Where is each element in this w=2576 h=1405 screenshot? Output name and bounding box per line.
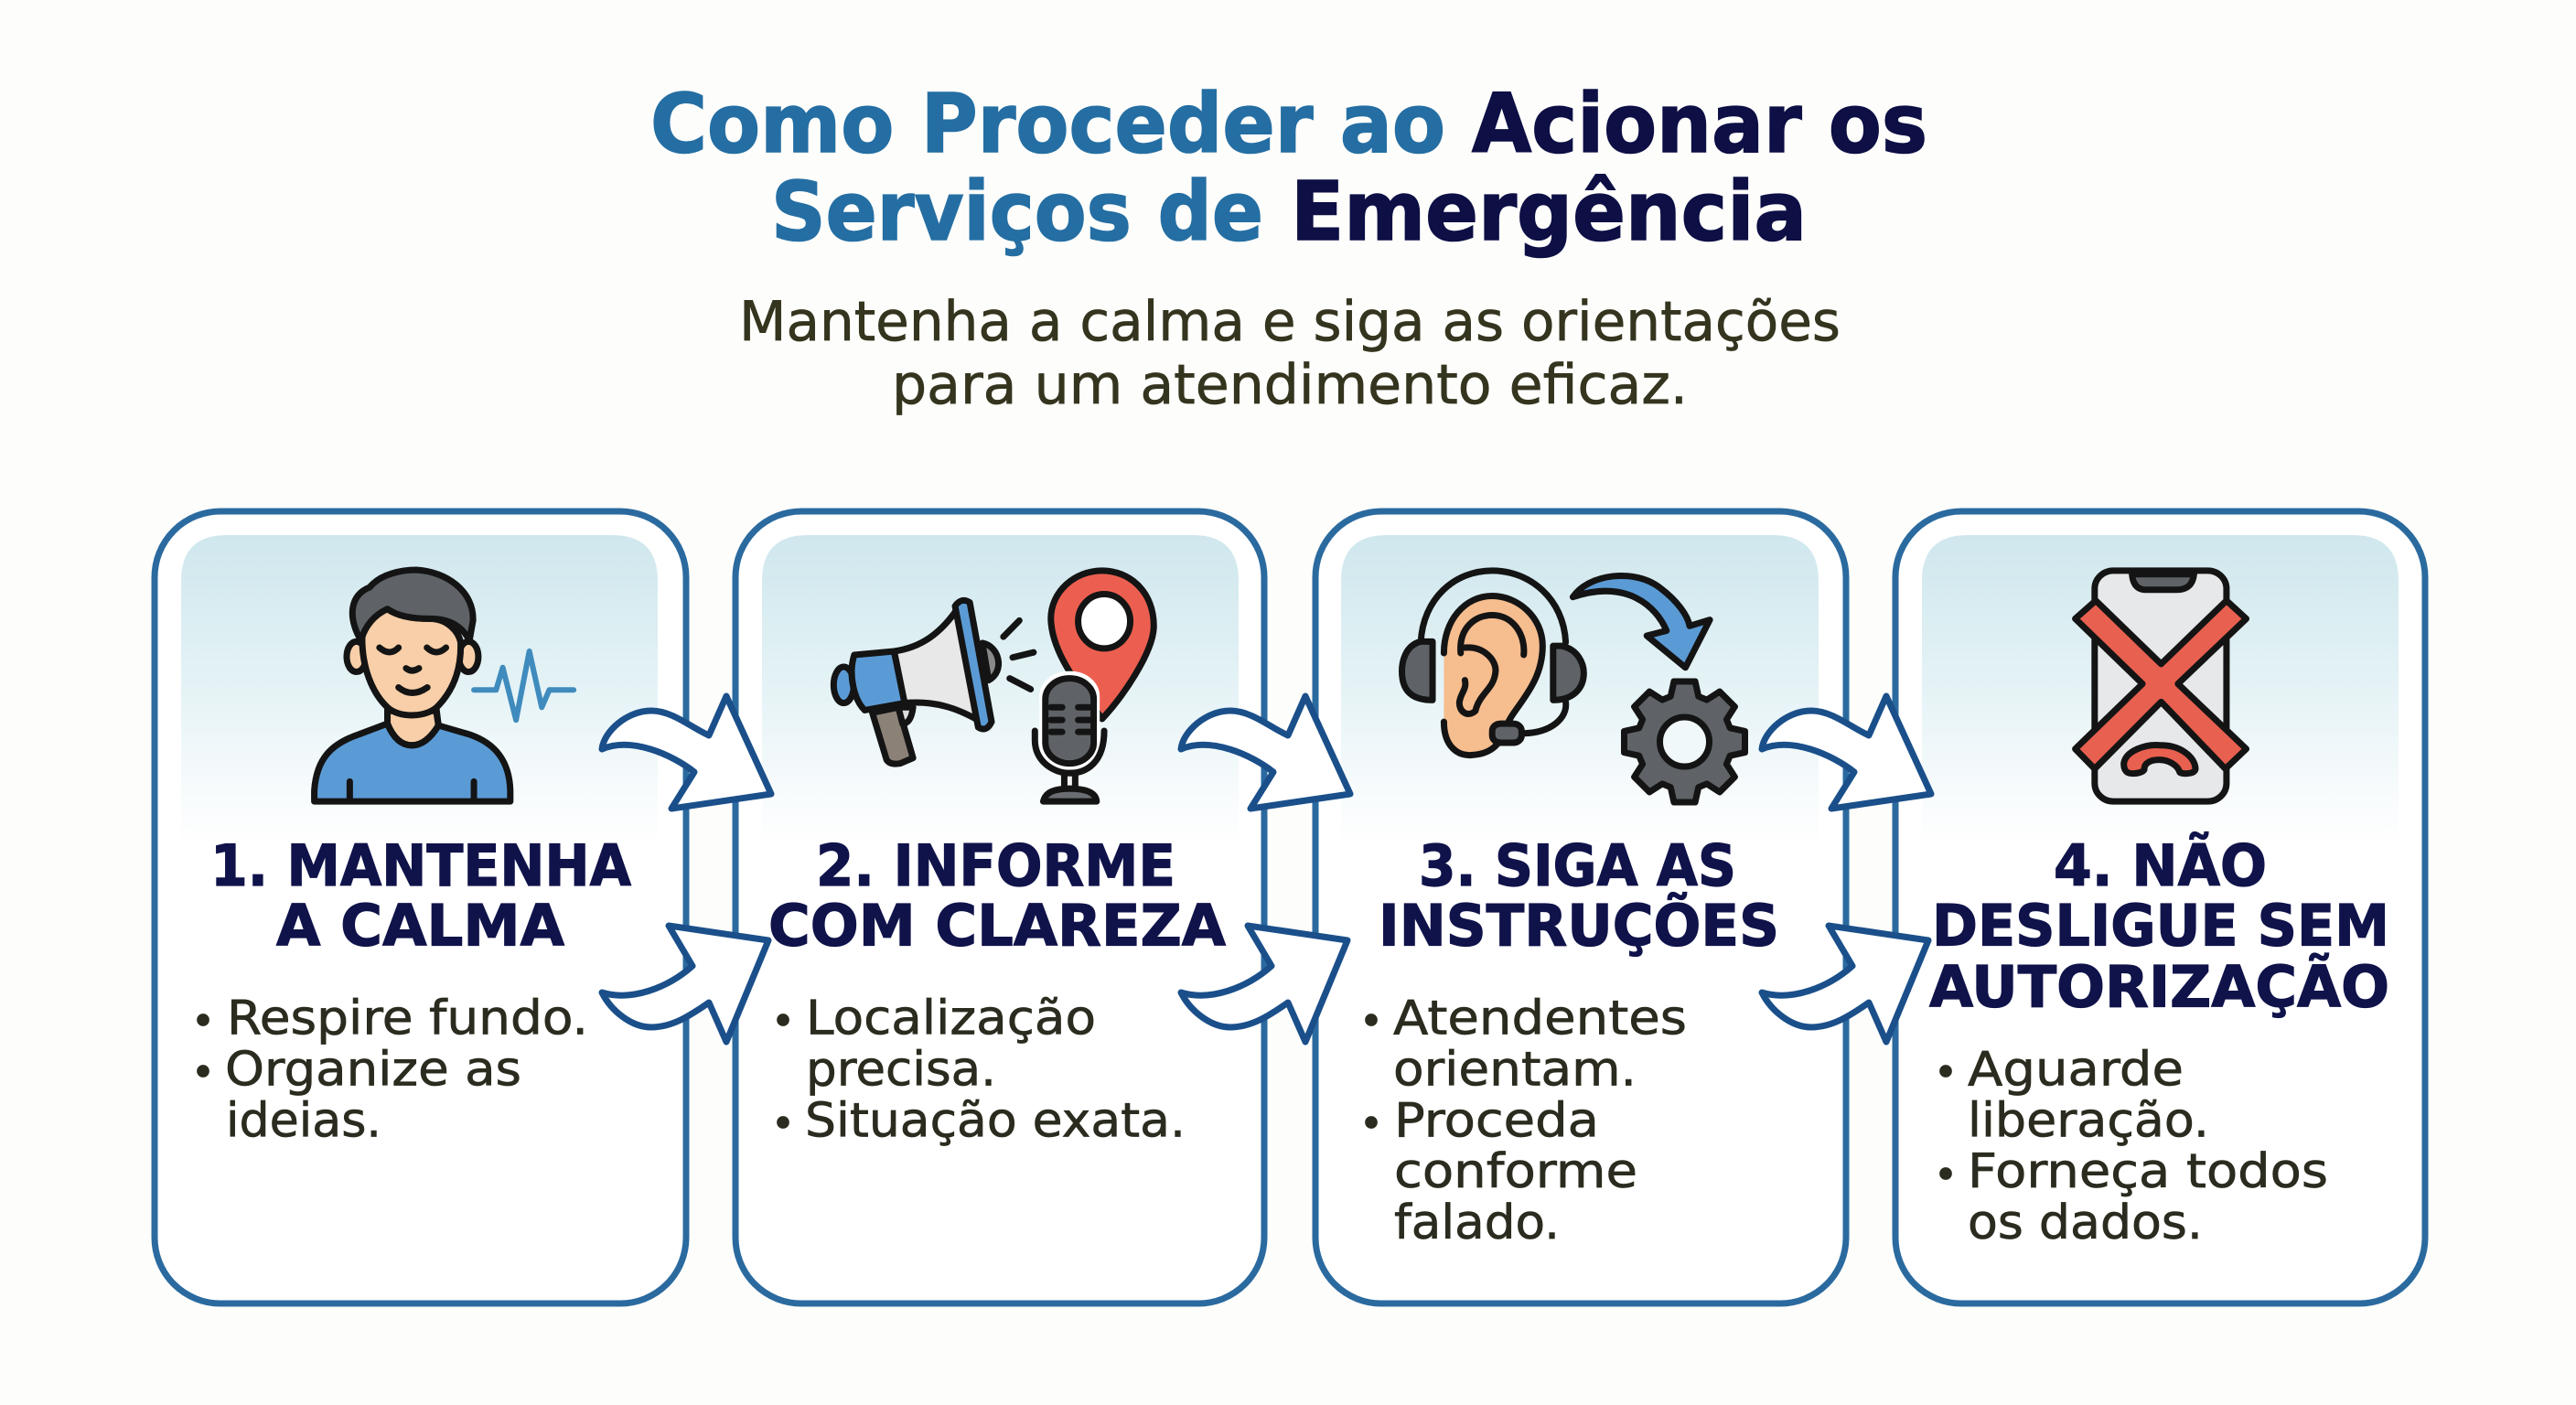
text: step 3 bullets: Atendentes xyxy=(1393,992,1687,1046)
panel: step 2 xyxy=(735,511,1264,1303)
heading: step 1 xyxy=(210,832,631,959)
icon: calm person with pulse xyxy=(315,570,574,801)
heading: step 4 xyxy=(1929,832,2389,1021)
title xyxy=(650,76,1927,259)
subtitle: Mantenha a calma e siga as orientações xyxy=(739,290,1841,354)
icon: phone crossed out xyxy=(2076,571,2247,801)
text: step 1 bullets: Organize as xyxy=(225,1043,521,1098)
title: Acionar os xyxy=(1472,76,1927,171)
text: step 4 bullets: os dados. xyxy=(1968,1196,2203,1250)
heading: step 2: 2. INFORME xyxy=(816,832,1175,899)
text: step 4 bullets: Forneça todos xyxy=(1968,1144,2328,1199)
icon: ear with headset, arrow and gear xyxy=(1402,571,1710,756)
arrow: step 2 to 3 lower xyxy=(1181,926,1347,1042)
heading: step 1: 1. MANTENHA xyxy=(210,832,631,899)
text: step 2 bullets: Localização xyxy=(806,992,1096,1046)
text: step 2 bullets: Situação exata. xyxy=(805,1094,1186,1149)
subtitle: para um atendimento eficaz. xyxy=(892,353,1688,417)
heading: step 4: AUTORIZAÇÃO xyxy=(1929,954,2389,1021)
heading: step 4: 4. NÃO xyxy=(2054,832,2267,899)
heading: step 4: DESLIGUE SEM xyxy=(1932,893,2389,959)
text: step 3 bullets: Proceda xyxy=(1394,1094,1599,1149)
panel: step 1 xyxy=(155,511,686,1303)
text: step 1 bullets: Respire fundo. xyxy=(227,992,588,1046)
panel: step 4 xyxy=(1895,511,2425,1303)
text: step 1 bullets: ideias. xyxy=(226,1094,381,1149)
arrow: step 1 to 2 lower xyxy=(602,926,768,1042)
title: Como Proceder ao xyxy=(650,76,1445,171)
heading: step 3 xyxy=(1379,832,1779,959)
text: step 1 bullets xyxy=(198,992,588,1149)
arrow: step 3 to 4 upper xyxy=(1762,696,1931,809)
heading: step 2 xyxy=(768,832,1226,959)
panel: step 3 xyxy=(1315,511,1846,1303)
arrow: step 3 to 4 lower xyxy=(1762,926,1928,1042)
text: step 2 bullets xyxy=(778,992,1186,1149)
icon: megaphone, location pin and microphone xyxy=(833,571,1154,801)
text: step 3 bullets: falado. xyxy=(1394,1196,1560,1250)
text: step 3 bullets: orientam. xyxy=(1393,1043,1637,1098)
text: step 4 bullets: liberação. xyxy=(1968,1094,2209,1149)
arrow: step 2 to 3 upper xyxy=(1181,696,1350,809)
heading: step 3: 3. SIGA AS xyxy=(1419,832,1736,899)
text: step 4 bullets xyxy=(1939,1043,2328,1250)
text: step 3 bullets xyxy=(1365,992,1687,1250)
text: step 2 bullets: precisa. xyxy=(806,1043,996,1098)
heading: step 3: INSTRUÇÕES xyxy=(1379,893,1779,959)
heading: step 1: A CALMA xyxy=(276,893,564,959)
title: Serviços de xyxy=(771,164,1263,259)
icon: gear xyxy=(1625,681,1745,802)
subtitle xyxy=(739,290,1841,417)
text: step 3 bullets: conforme xyxy=(1394,1144,1637,1199)
title: Emergência xyxy=(1291,164,1807,259)
heading: step 2: COM CLAREZA xyxy=(768,893,1226,959)
arrow: step 1 to 2 upper xyxy=(602,696,771,809)
text: step 4 bullets: Aguarde xyxy=(1968,1043,2184,1098)
